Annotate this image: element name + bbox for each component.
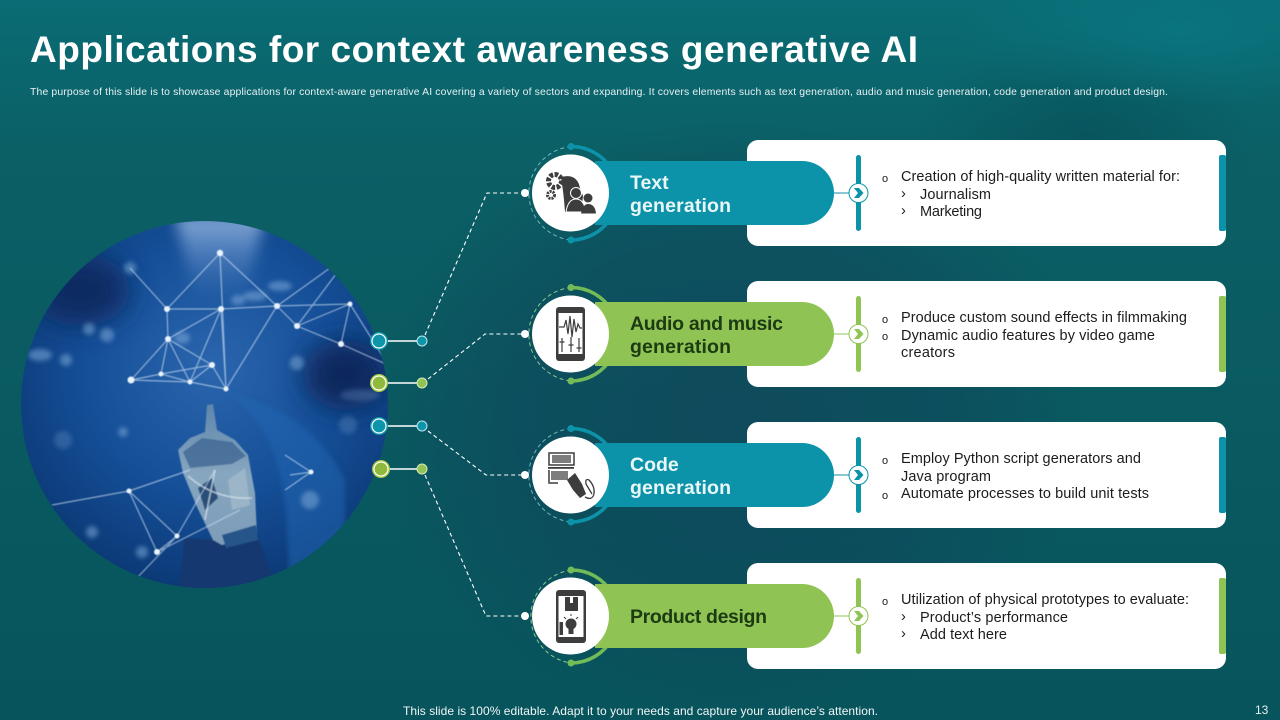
network nodes: [126, 250, 352, 555]
body text: Utilization of physical prototypes to evaluate:: [901, 592, 1189, 608]
icon: phone with sound wave: [556, 307, 585, 361]
body text: [882, 310, 1187, 361]
heading: [630, 313, 783, 358]
connectors from image to rows: [370, 193, 525, 616]
body text: Employ Python script generators and: [901, 451, 1141, 467]
icon: phone with box and bulb: [556, 590, 586, 643]
body text: [882, 169, 1180, 220]
body text: ›: [901, 186, 906, 202]
divider with arrow: [834, 578, 868, 654]
connector node: teal 1: [370, 332, 427, 350]
connector node: teal 2: [370, 417, 427, 435]
panel: text generation: [521, 140, 1226, 246]
body text: Automate processes to build unit tests: [901, 486, 1149, 502]
body text: Produce custom sound effects in filmmaking: [901, 310, 1187, 326]
body text: o: [882, 490, 888, 502]
body text: o: [882, 173, 888, 185]
blurred bokeh points: [28, 262, 380, 558]
connector node: green 2: [372, 460, 427, 478]
circular image: robot hand and network: [20, 215, 390, 590]
icon: head with gears and people: [548, 174, 596, 214]
body text: Product’s performance: [920, 610, 1068, 626]
heading: Audio and music: [630, 313, 783, 335]
body text: creators: [901, 345, 955, 361]
body text: Journalism: [920, 187, 991, 203]
body text: o: [882, 331, 888, 343]
icon: QR code scanner: [548, 453, 594, 498]
panel: code generation: [521, 422, 1226, 528]
heading: Product design: [630, 606, 767, 628]
heading: Text: [630, 172, 669, 194]
body text: o: [882, 314, 888, 326]
body text: [882, 451, 1149, 502]
heading: Code: [630, 454, 679, 476]
body text: ›: [901, 203, 906, 219]
hand: [178, 404, 272, 590]
body text: o: [882, 455, 888, 467]
body text: o: [882, 596, 888, 608]
divider with arrow: [834, 437, 868, 513]
body text: Java program: [901, 469, 991, 485]
subtitle description: The purpose of this slide is to showcase applications for context-aware generative AI covering a variety of sectors and expanding. It covers elements such as text generation, audio and music generation, code generation and product design.: [30, 87, 1168, 98]
network lines: [52, 253, 388, 580]
body text: ›: [901, 626, 906, 642]
panel: audio and music generation: [521, 281, 1226, 387]
body text: Creation of high-quality written material for:: [901, 169, 1180, 185]
heading: generation: [630, 477, 731, 499]
body text: Add text here: [920, 627, 1007, 643]
connector node: green 1: [370, 374, 427, 392]
body text: ›: [901, 609, 906, 625]
divider with arrow: [834, 155, 868, 231]
page number: 13: [1255, 703, 1269, 717]
panel: product design: [521, 563, 1226, 669]
heading: [630, 172, 731, 217]
heading: generation: [630, 195, 731, 217]
body text: Marketing: [920, 204, 982, 220]
heading: [630, 454, 731, 499]
body text: [882, 592, 1189, 643]
divider with arrow: [834, 296, 868, 372]
title: Applications for context awareness generative AI: [30, 29, 918, 70]
body text: Dynamic audio features by video game: [901, 328, 1155, 344]
footer note: This slide is 100% editable. Adapt it to your needs and capture your audience’s attention.: [403, 704, 878, 718]
heading: generation: [630, 336, 731, 358]
